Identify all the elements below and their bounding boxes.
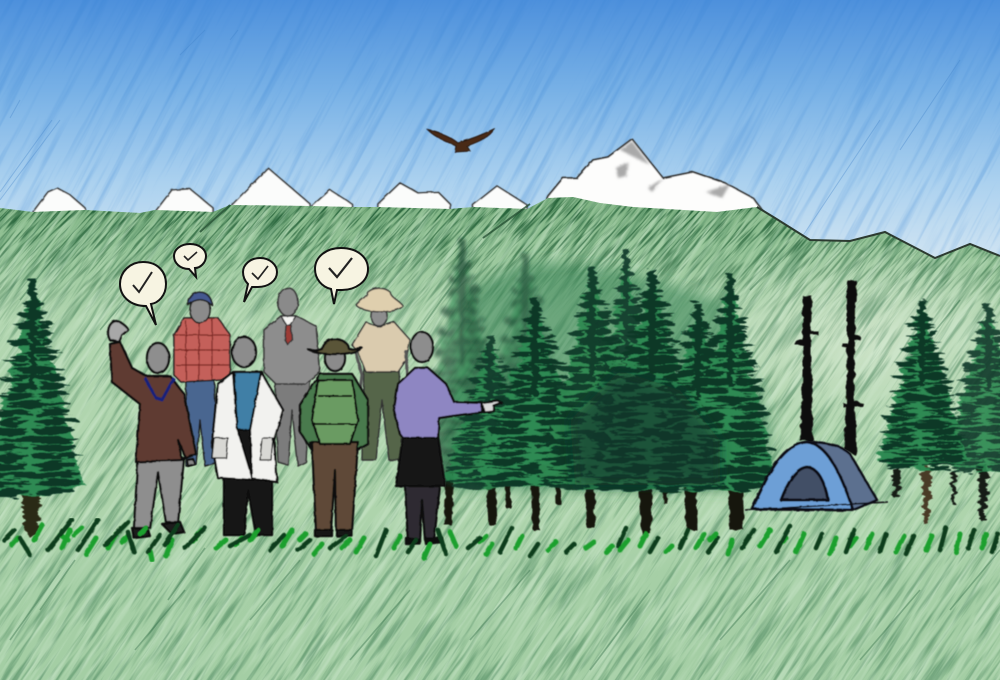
tree: left edge conifer — [0, 280, 85, 538]
speech bubble: plaid shirt — [174, 244, 206, 277]
speech bubble: waving figure — [120, 262, 166, 325]
hills — [0, 197, 1000, 680]
person: grey suit — [264, 288, 320, 466]
trees: right edge conifers — [876, 300, 1000, 525]
snow-capped mountains — [33, 139, 765, 216]
tent — [745, 442, 888, 510]
forest shade — [445, 260, 770, 490]
person: waving figure in brown sweater — [108, 321, 196, 538]
forest: tree trunks — [444, 470, 744, 534]
person: hiker with backpack — [300, 339, 368, 536]
person: plaid shirt with beanie — [174, 292, 230, 466]
person: ranger with flat hat — [352, 288, 410, 460]
forest dark core — [570, 370, 720, 485]
speech bubble: hiker — [315, 248, 368, 304]
bird: soaring hawk — [428, 129, 494, 152]
grass — [4, 520, 998, 560]
person: woman in lavender pointing at the forest — [394, 332, 502, 544]
dead snags — [795, 280, 863, 457]
person: scientist in lab coat — [212, 337, 283, 535]
sky — [0, 0, 1000, 260]
speech bubble: suit — [243, 258, 277, 302]
forest: conifers — [414, 240, 778, 491]
